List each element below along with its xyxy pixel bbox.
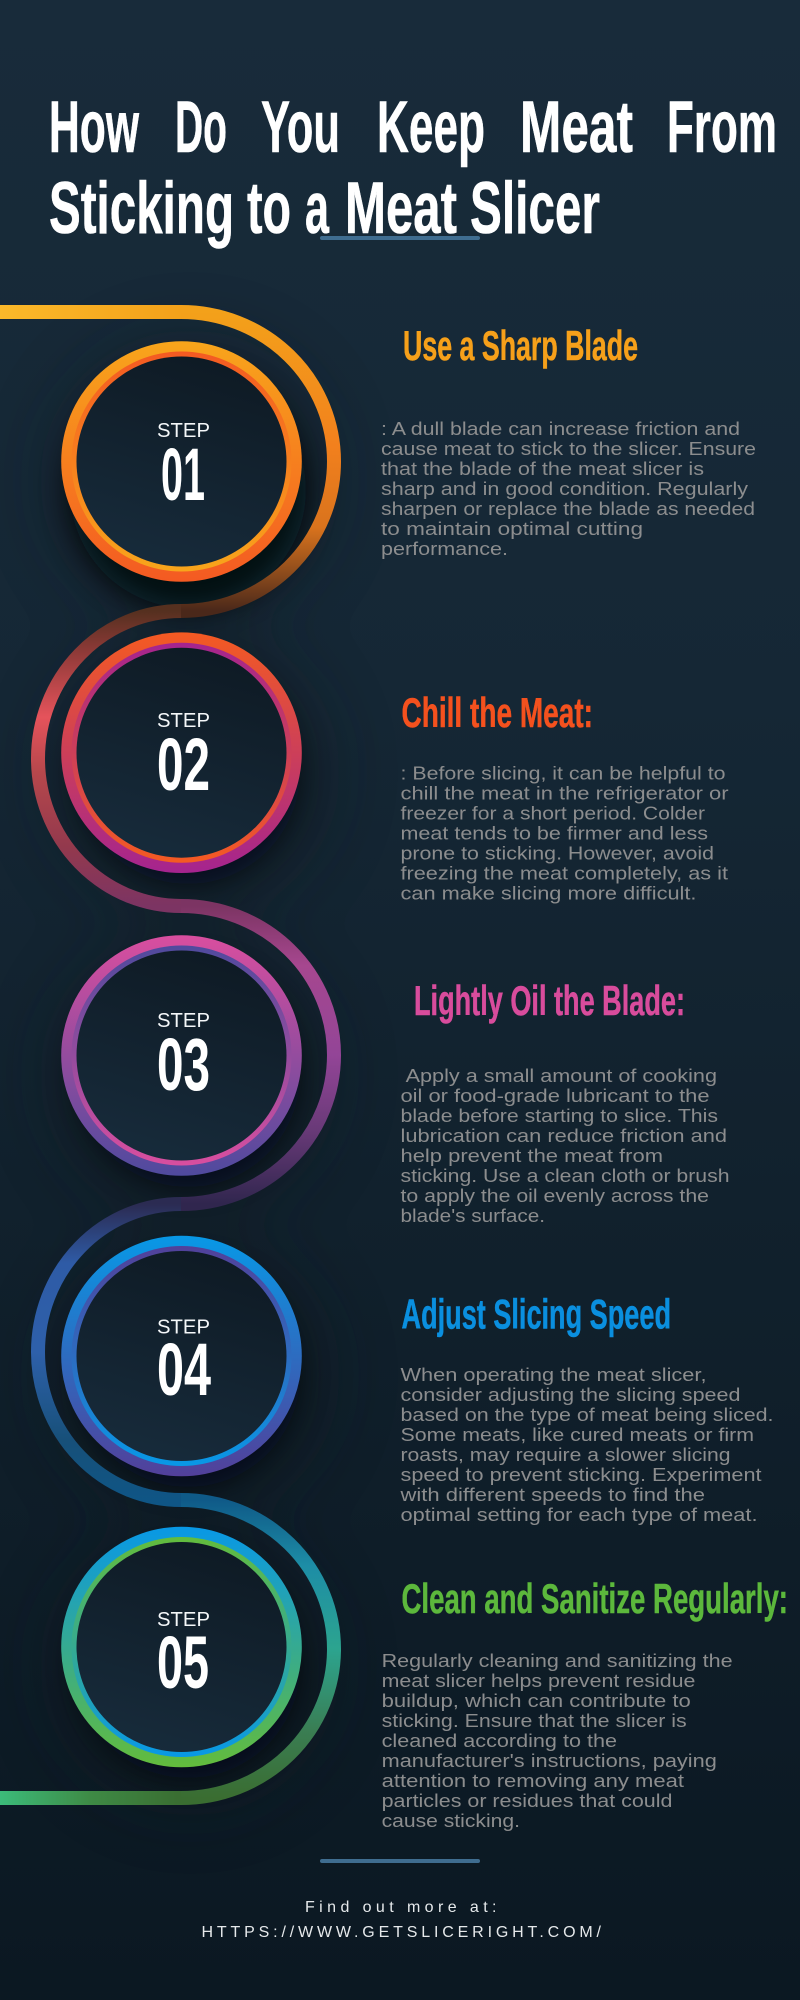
panel: step 1 text <box>381 322 756 559</box>
panel: step 3 text <box>400 977 730 1226</box>
body: Adjust Slicing Speed: When operating the meat slicer, <box>400 1365 706 1385</box>
body: Clean and Sanitize Regularly <box>382 1651 733 1831</box>
body: Clean and Sanitize Regularly: cleaned according to the <box>382 1731 617 1751</box>
step 4 badge <box>61 1236 302 1476</box>
panel: step 2 text <box>400 689 729 904</box>
step 2 badge <box>61 632 302 873</box>
body: Lightly Oil the Blade: Apply a small amount of cooking <box>406 1066 717 1086</box>
body: Clean and Sanitize Regularly: sticking. Ensure that the slicer is <box>382 1711 687 1731</box>
body: Chill the Meat: can make slicing more difficult. <box>400 884 696 904</box>
body: Chill the Meat: prone to sticking. However, avoid <box>400 844 714 864</box>
body: Adjust Slicing Speed: consider adjusting the slicing speed <box>400 1385 740 1405</box>
body: Adjust Slicing Speed: Some meats, like cured meats or firm <box>400 1425 754 1445</box>
body: Clean and Sanitize Regularly: manufacturer's instructions, paying <box>382 1751 717 1771</box>
title: Do <box>175 87 227 168</box>
title: You <box>261 87 340 168</box>
step 3 label: STEP <box>157 1010 210 1032</box>
body: Chill the Meat: freezing the meat completely, as it <box>400 864 728 884</box>
body: Lightly Oil the Blade: help prevent the meat from <box>400 1146 663 1166</box>
body: Clean and Sanitize Regularly: cause sticking. <box>382 1811 520 1831</box>
body: Lightly Oil the Blade: to apply the oil evenly across the <box>400 1186 709 1206</box>
heading: Use a Sharp Blade: Use a Sharp Blade <box>403 322 638 369</box>
step 2 number: 02 <box>157 723 210 806</box>
body: Adjust Slicing Speed: optimal setting for each type of meat. <box>400 1505 758 1525</box>
body: Use a Sharp Blade: sharpen or replace the blade as needed <box>381 499 755 519</box>
body: Use a Sharp Blade <box>381 419 756 559</box>
title: How <box>49 87 139 168</box>
heading: Chill the Meat: Chill the Meat: <box>402 689 593 736</box>
body: Chill the Meat: meat tends to be firmer and less <box>400 824 708 844</box>
body: Clean and Sanitize Regularly: attention to removing any meat <box>382 1771 684 1791</box>
body: Use a Sharp Blade: to maintain optimal cutting <box>381 519 643 539</box>
title: Keep <box>377 87 485 168</box>
body: Clean and Sanitize Regularly: particles or residues that could <box>382 1791 672 1811</box>
step 1 label: STEP <box>157 420 210 442</box>
body: Lightly Oil the Blade: blade before starting to slice. This <box>400 1106 718 1126</box>
title: a <box>305 168 330 249</box>
step 1 badge <box>61 341 302 582</box>
title: Slicer <box>470 168 600 249</box>
body: Adjust Slicing Speed: roasts, may require a slower slicing <box>400 1445 730 1465</box>
body: Use a Sharp Blade: sharp and in good condition. Regularly <box>381 479 748 499</box>
winding gradient ribbon <box>0 312 334 1798</box>
body: Clean and Sanitize Regularly: Regularly cleaning and sanitizing the <box>382 1651 733 1671</box>
body: Clean and Sanitize Regularly: meat slicer helps prevent residue <box>382 1671 695 1691</box>
step 5 number: 05 <box>157 1621 209 1704</box>
body: Chill the Meat: : Before slicing, it can be helpful to <box>400 764 726 784</box>
step 5 label: STEP <box>157 1609 210 1631</box>
panel: step 5 text <box>382 1575 788 1831</box>
body: Lightly Oil the Blade <box>400 1066 730 1226</box>
footer text <box>202 1899 602 1941</box>
panel: step 4 text <box>399 1290 774 1525</box>
body: Use a Sharp Blade: that the blade of the meat slicer is <box>381 459 704 479</box>
body: Adjust Slicing Speed: with different speeds to find the <box>399 1485 705 1505</box>
body: Lightly Oil the Blade: oil or food-grade lubricant to the <box>400 1086 710 1106</box>
title underline <box>320 236 480 240</box>
body: Lightly Oil the Blade: lubrication can reduce friction and <box>400 1126 727 1146</box>
step 4 label: STEP <box>157 1316 210 1338</box>
step 2 label: STEP <box>157 710 210 732</box>
body: Chill the Meat: freezer for a short period. Colder <box>400 804 705 824</box>
step 1 number: 01 <box>161 433 205 516</box>
body: Chill the Meat <box>400 764 729 904</box>
step 3 number: 03 <box>157 1023 210 1106</box>
title: Meat <box>520 87 633 168</box>
step 4 number: 04 <box>157 1328 211 1411</box>
body: Lightly Oil the Blade: blade's surface. <box>400 1206 545 1226</box>
circle shadows <box>40 330 340 1816</box>
body: Use a Sharp Blade: : A dull blade can increase friction and <box>381 419 740 439</box>
step 3 badge <box>61 935 302 1176</box>
step 5 badge <box>61 1527 302 1767</box>
body: Adjust Slicing Speed: speed to prevent sticking. Experiment <box>400 1465 762 1485</box>
title: to <box>247 168 291 249</box>
body: Use a Sharp Blade: performance. <box>381 539 508 559</box>
body: Adjust Slicing Speed <box>399 1365 774 1525</box>
title <box>49 87 777 249</box>
body: Clean and Sanitize Regularly: buildup, which can contribute to <box>382 1691 691 1711</box>
body: Adjust Slicing Speed: based on the type of meat being sliced. <box>400 1405 774 1425</box>
title: Meat <box>345 168 457 249</box>
body: Use a Sharp Blade: cause meat to stick to the slicer. Ensure <box>381 439 756 459</box>
title: Sticking <box>49 168 234 249</box>
footer divider <box>320 1859 480 1863</box>
body: Lightly Oil the Blade: sticking. Use a clean cloth or brush <box>400 1166 730 1186</box>
footer text: HTTPS://WWW.GETSLICERIGHT.COM/ <box>202 1924 602 1941</box>
body: Chill the Meat: chill the meat in the refrigerator or <box>400 784 729 804</box>
footer text: Find out more at: <box>305 1899 496 1916</box>
